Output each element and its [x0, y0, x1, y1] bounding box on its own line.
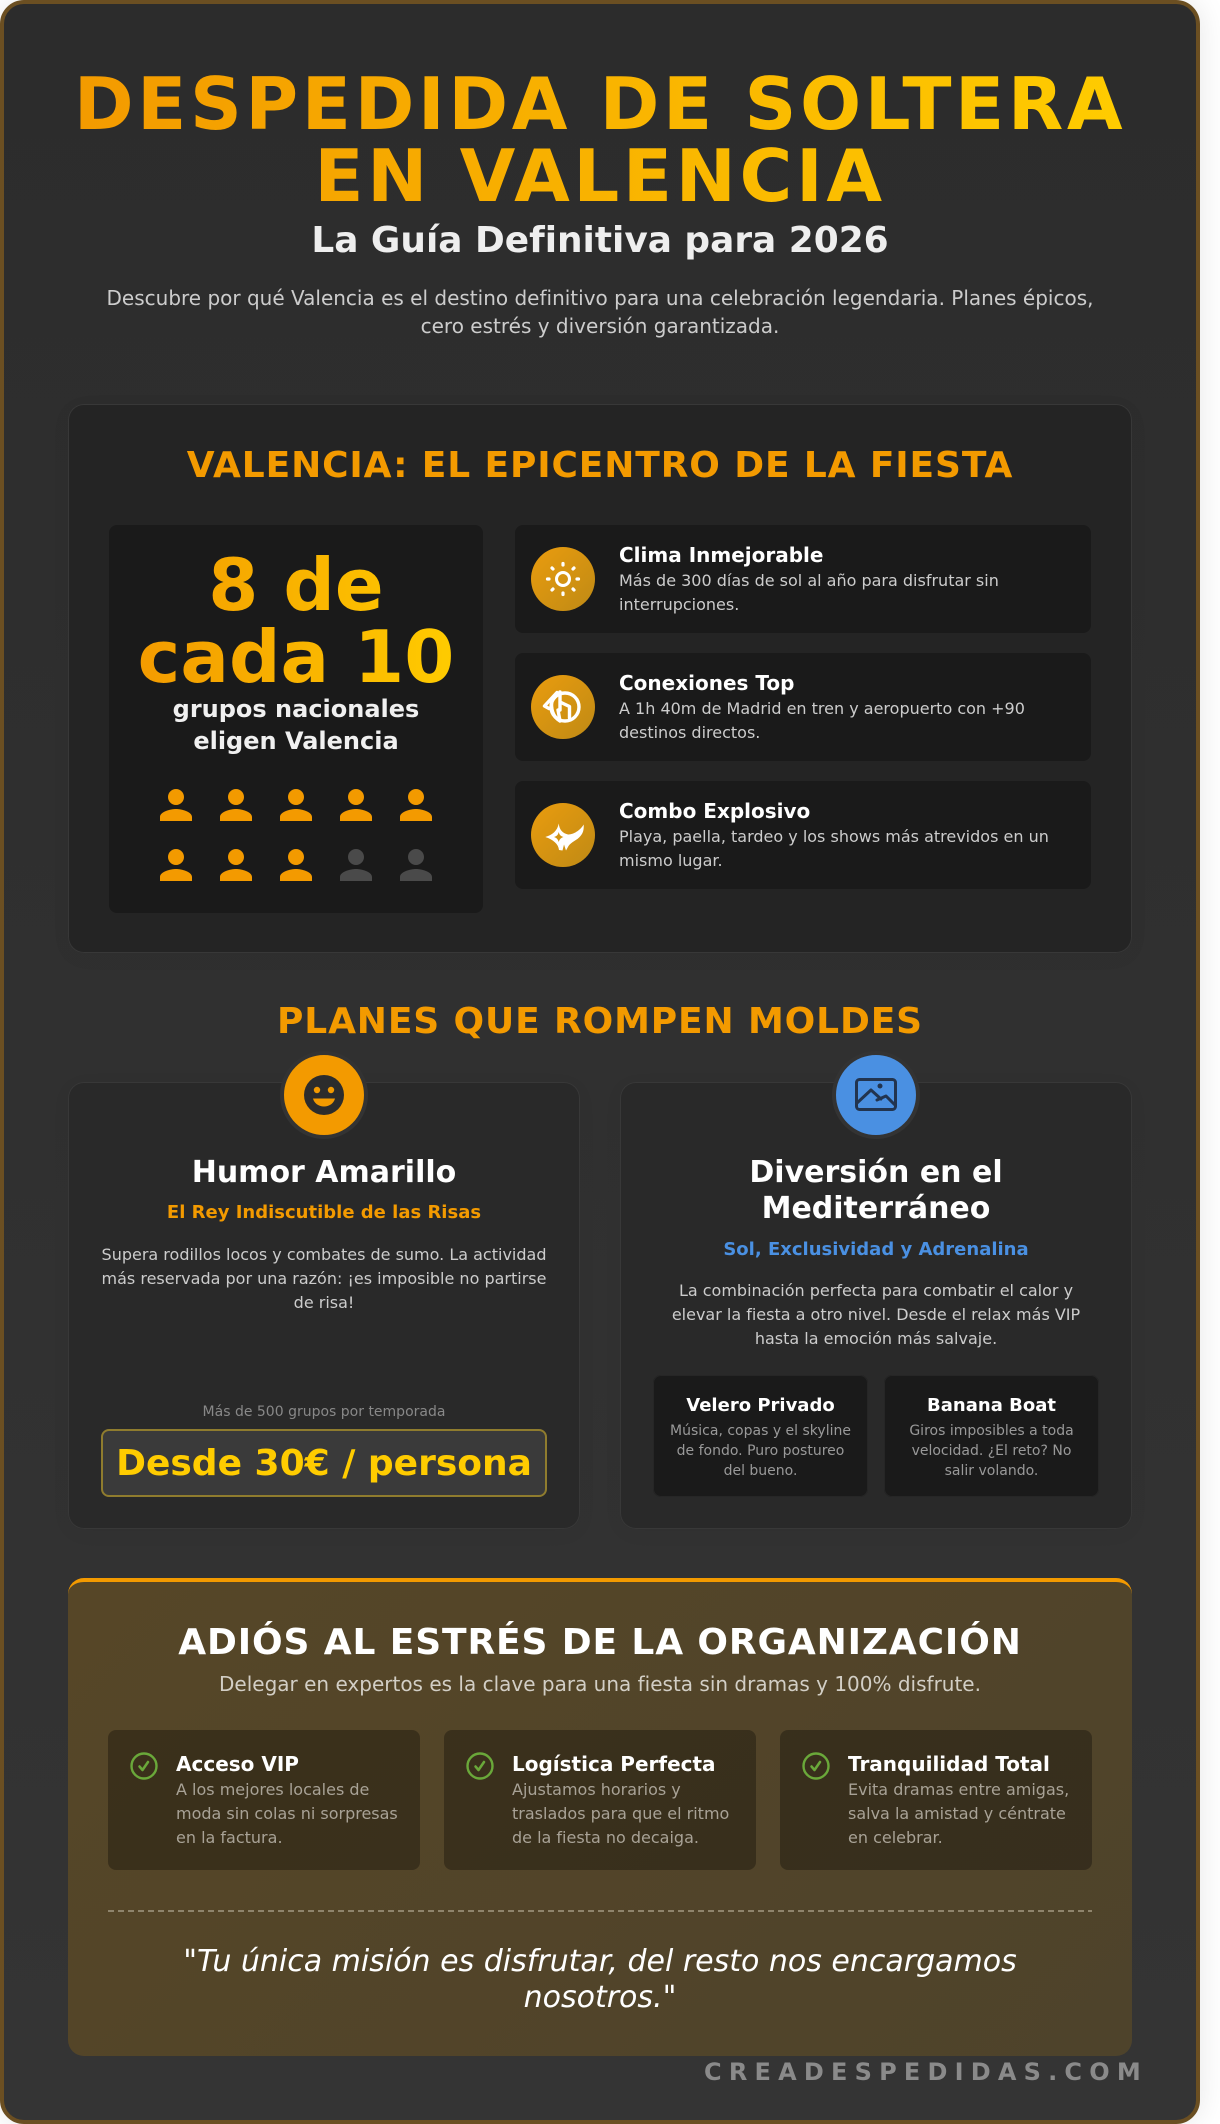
feature title: Combo Explosivo [619, 799, 810, 823]
small note: Más de 500 grupos por temporada [203, 1404, 445, 1420]
intro text [107, 286, 1093, 338]
sub card text: del bueno. [724, 1463, 797, 1479]
card text: más reservada por una razón: ¡es imposible no partirse [102, 1269, 546, 1288]
benefit text: Ajustamos horarios y [512, 1780, 681, 1799]
card text [672, 1281, 1080, 1348]
benefit title: Logística Perfecta [512, 1752, 716, 1776]
benefit text: salva la amistad y céntrate [848, 1804, 1066, 1823]
benefit title: Acceso VIP [176, 1752, 299, 1776]
feature text [619, 699, 1025, 742]
sub card text: Giros imposibles a toda [909, 1423, 1074, 1439]
sub card title: Velero Privado [686, 1395, 835, 1416]
intro text: cero estrés y diversión garantizada. [421, 314, 779, 338]
card title: Humor Amarillo [192, 1155, 456, 1190]
feature text: mismo lugar. [619, 851, 723, 870]
feature: conexiones [515, 653, 1091, 761]
subtitle: La Guía Definitiva para 2026 [311, 220, 889, 260]
panel: Valencia epicentro [68, 404, 1132, 953]
title: EN VALENCIA [314, 134, 886, 218]
card title: Mediterráneo [762, 1191, 990, 1226]
icon: check [466, 1752, 494, 1780]
feature text: Playa, paella, tardeo y los shows más atrevidos en un [619, 827, 1049, 846]
title [68, 68, 1132, 212]
icon: landscape image [832, 1051, 920, 1139]
icon: check [130, 1752, 158, 1780]
feature text [619, 571, 999, 614]
icon: smile [280, 1051, 368, 1139]
feature: combo [515, 781, 1091, 889]
icon: sun [531, 547, 595, 611]
big stat number: cada 10 [138, 615, 454, 699]
benefit text: en celebrar. [848, 1828, 943, 1847]
panel subheading: Delegar en expertos es la clave para una fiesta sin dramas y 100% disfrute. [219, 1672, 981, 1696]
card subtitle: El Rey Indiscutible de las Risas [167, 1202, 481, 1223]
card text: elevar la fiesta a otro nivel. Desde el relax más VIP [672, 1305, 1080, 1324]
feature title: Conexiones Top [619, 671, 794, 695]
stat caption: eligen Valencia [193, 727, 399, 755]
benefit text: A los mejores locales de [176, 1780, 369, 1799]
quote: nosotros." [524, 1980, 676, 2015]
card title [749, 1155, 1003, 1226]
card text: Supera rodillos locos y combates de sumo. La actividad [102, 1245, 546, 1264]
feature text: destinos directos. [619, 723, 760, 742]
card text: hasta la emoción más salvaje. [755, 1329, 997, 1348]
feature title: Clima Inmejorable [619, 543, 823, 567]
feature text: Más de 300 días de sol al año para disfrutar sin [619, 571, 999, 590]
benefit text: Evita dramas entre amigas, [848, 1780, 1069, 1799]
benefit text: de la fiesta no decaiga. [512, 1828, 699, 1847]
icon: sparkle [531, 803, 595, 867]
panel: Diversión en el Mediterráneo [620, 1082, 1132, 1529]
pictogram: 8 of 10 people [160, 789, 432, 881]
section heading: VALENCIA: EL EPICENTRO DE LA FIESTA [187, 445, 1013, 486]
benefit text [848, 1780, 1069, 1847]
benefit title: Tranquilidad Total [848, 1752, 1050, 1776]
feature: clima [515, 525, 1091, 633]
benefit: logística [444, 1730, 756, 1870]
footer brand: CREADESPEDIDAS.COM [704, 2058, 1148, 2086]
benefit text: en la factura. [176, 1828, 283, 1847]
stat caption [173, 695, 419, 755]
panel: Humor Amarillo [68, 1082, 580, 1529]
price box [101, 1429, 547, 1497]
sub card text: salir volando. [945, 1463, 1038, 1479]
card subtitle: Sol, Exclusividad y Adrenalina [723, 1238, 1029, 1260]
card text: La combinación perfecta para combatir el calor y [679, 1281, 1073, 1300]
benefit text: moda sin colas ni sorpresas [176, 1804, 398, 1823]
big stat number [133, 549, 459, 693]
price box: Desde 30€ / persona [116, 1443, 532, 1484]
feature text [619, 827, 1049, 870]
sub card text: velocidad. ¿El reto? No [912, 1443, 1071, 1459]
quote: "Tu única misión es disfrutar, del resto nos encargamos [183, 1944, 1017, 1979]
title: DESPEDIDA DE SOLTERA [74, 62, 1126, 146]
panel: adiós al estrés [68, 1578, 1132, 2056]
quote [183, 1944, 1017, 2015]
benefit text: traslados para que el ritmo [512, 1804, 729, 1823]
feature text: A 1h 40m de Madrid en tren y aeropuerto con +90 [619, 699, 1025, 718]
panel heading: ADIÓS AL ESTRÉS DE LA ORGANIZACIÓN [178, 1622, 1022, 1663]
sub card: banana boat [884, 1375, 1099, 1497]
sub card text: Música, copas y el skyline [670, 1423, 851, 1439]
benefit: acceso VIP [108, 1730, 420, 1870]
big stat number: 8 de [208, 543, 384, 627]
stat caption: grupos nacionales [173, 695, 419, 723]
feature text: interrupciones. [619, 595, 739, 614]
benefit: tranquilidad [780, 1730, 1092, 1870]
icon: connections [531, 675, 595, 739]
stat card: 8 de cada 10 [109, 525, 483, 913]
section heading: planes: PLANES QUE ROMPEN MOLDES [277, 1001, 923, 1042]
benefit text [176, 1780, 398, 1847]
sub card: velero [653, 1375, 868, 1497]
icon: check [802, 1752, 830, 1780]
sub card title: Banana Boat [927, 1395, 1056, 1416]
card text: de risa! [294, 1293, 354, 1312]
sub card text [670, 1423, 851, 1479]
intro text: Descubre por qué Valencia es el destino definitivo para una celebración legendaria. Planes épicos, [107, 286, 1093, 310]
benefit text [512, 1780, 729, 1847]
card text [102, 1245, 546, 1312]
sub card text [909, 1423, 1074, 1479]
sub card text: de fondo. Puro postureo [677, 1443, 844, 1459]
card title: Diversión en el [749, 1155, 1003, 1190]
